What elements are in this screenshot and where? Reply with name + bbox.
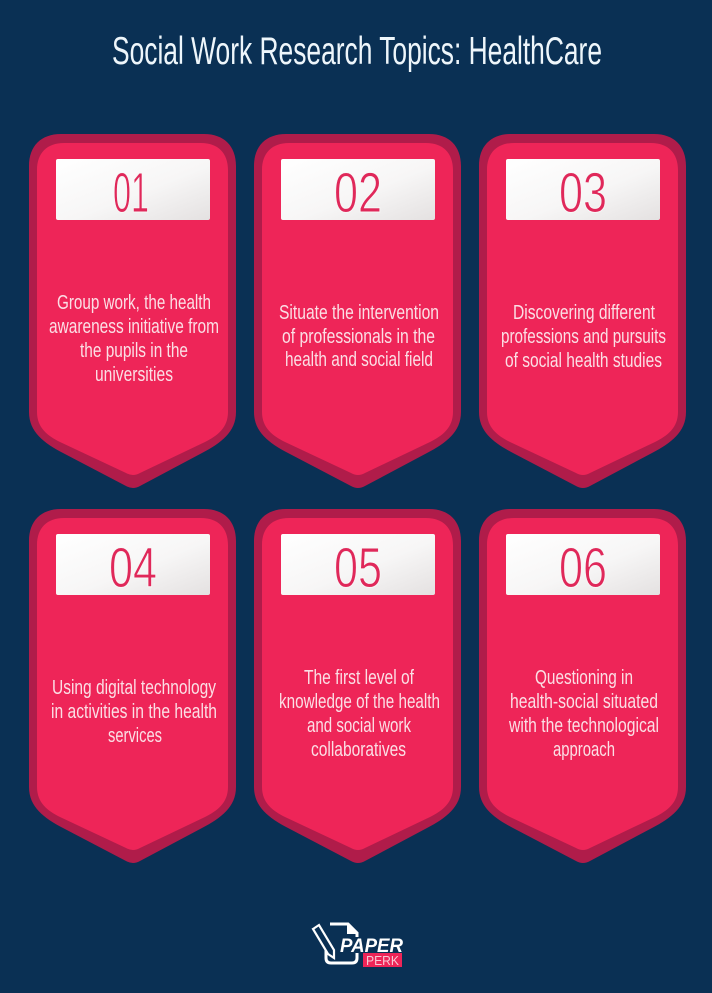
text: card 06: health-social situated xyxy=(510,691,658,713)
text: card 02: Situate the intervention xyxy=(279,302,439,324)
text: card 03: professions and pursuits xyxy=(501,326,666,348)
text: card 02: health and social field xyxy=(285,349,433,371)
panel: card 04 xyxy=(29,509,236,863)
text: card 06: with the technological xyxy=(508,715,659,737)
panel: card 02 xyxy=(254,134,461,488)
panel: card 06 xyxy=(479,509,686,863)
number badge 03 xyxy=(506,159,660,225)
text: card 03: Discovering different xyxy=(513,302,655,324)
number badge 02 xyxy=(281,159,435,225)
number badge 01 xyxy=(56,159,210,225)
number badge 06 xyxy=(506,534,660,600)
panel: card 01 xyxy=(29,134,236,488)
number badge 06: 06 xyxy=(559,536,607,600)
text: card 05 xyxy=(279,667,440,761)
text: card 02: of professionals in the xyxy=(282,326,435,348)
number badge 01: 01 xyxy=(113,161,149,225)
text: card 05: The first level of xyxy=(304,667,414,689)
text: card 06: approach xyxy=(553,739,615,761)
text: card 05: and social work xyxy=(307,715,412,737)
text: card 01: the pupils in the xyxy=(80,340,188,362)
icon: document and pencil xyxy=(313,924,357,963)
logo: Paper Perk xyxy=(313,924,403,968)
text: card 03 xyxy=(501,302,666,372)
text: card 01: awareness initiative from xyxy=(49,316,219,338)
logo badge: perk: PERK xyxy=(366,953,399,968)
text: card 01: universities xyxy=(95,364,173,386)
text: card 06: Questioning in xyxy=(535,667,633,689)
number badge 03: 03 xyxy=(559,161,607,225)
text: card 01: Group work, the health xyxy=(57,292,211,314)
panel: card 03 xyxy=(479,134,686,488)
number badge 05 xyxy=(281,534,435,600)
text: card 04: in activities in the health xyxy=(51,701,217,723)
text: card 03: of social health studies xyxy=(505,350,662,372)
panel: card 05 xyxy=(254,509,461,863)
text: card 01 xyxy=(49,292,219,386)
text: card 04 xyxy=(51,677,217,747)
text: card 04: services xyxy=(108,725,162,747)
text: card 02 xyxy=(279,302,439,371)
text: card 05: collaboratives xyxy=(311,739,406,761)
text: card 04: Using digital technology xyxy=(52,677,216,699)
number badge 02: 02 xyxy=(334,161,382,225)
number badge 05: 05 xyxy=(334,536,382,600)
logo wordmark: PAPER xyxy=(340,936,403,957)
text: card 05: knowledge of the health xyxy=(279,691,440,713)
number badge 04: 04 xyxy=(109,536,157,600)
text: card 06 xyxy=(508,667,659,761)
number badge 04 xyxy=(56,534,210,600)
